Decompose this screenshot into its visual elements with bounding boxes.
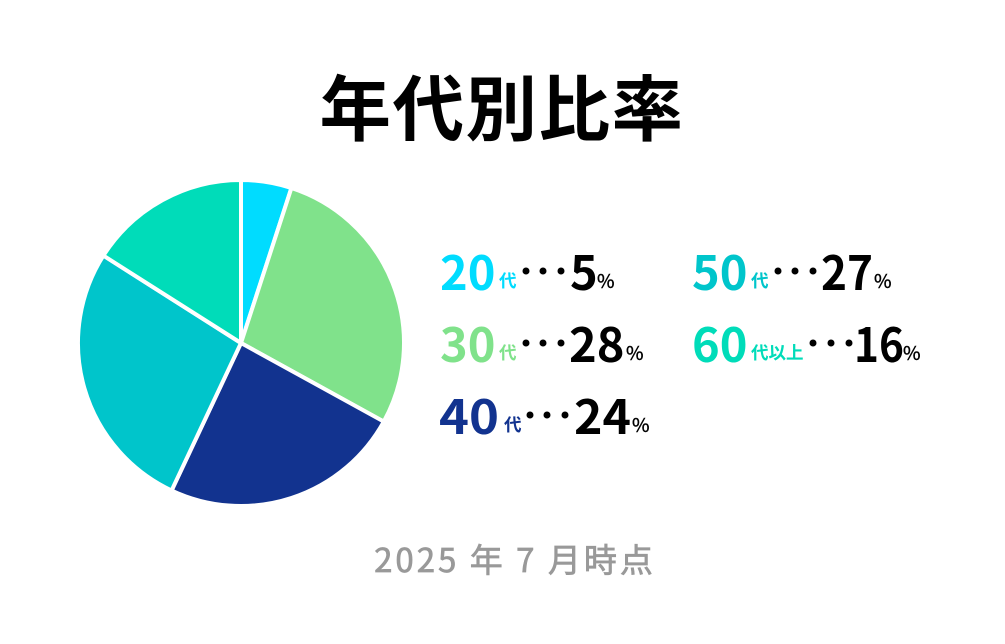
legend: 30代 28%: %: [626, 339, 644, 366]
legend: 50代 27%: %: [874, 267, 892, 294]
legend: 20代 5%: [440, 235, 614, 304]
legend: 60代以上 16%: 代以上: [751, 340, 804, 365]
pie chart: [78, 180, 404, 506]
legend: 60代以上 16%: 16: [854, 307, 904, 376]
legend: 20代 5%: 20: [440, 235, 495, 304]
date note: 2025 年 7 月時点: [374, 534, 656, 582]
legend: 30代 28%: 代: [499, 340, 517, 365]
legend: 40代 24%: 40: [439, 379, 499, 448]
legend: 20代 5%: 5: [570, 235, 598, 304]
legend: 40代 24%: %: [632, 411, 650, 438]
legend: 50代 27%: 27: [821, 235, 873, 304]
slice: 30代 28%: [241, 188, 404, 422]
legend: 60代以上 16%: %: [903, 339, 920, 366]
legend: 40代 24%: 24: [574, 379, 631, 448]
slice: 50代 27%: [78, 256, 241, 490]
legend: 60代以上 16%: 60: [692, 307, 747, 376]
legend: 50代 27%: 代: [751, 268, 769, 293]
legend: 30代 28%: [440, 307, 644, 376]
legend: 60代以上 16%: [692, 307, 920, 376]
legend: 50代 27%: 50: [692, 235, 747, 304]
slice: 20代 5%: [241, 180, 291, 343]
slice: 40代 24%: [172, 343, 384, 506]
legend: 20代 5%: %: [597, 267, 614, 294]
slice: 60代以上 16%: [103, 180, 241, 343]
legend: 20代 5%: 代: [499, 268, 517, 293]
legend: 30代 28%: 28: [569, 307, 624, 376]
legend: 50代 27%: [692, 235, 892, 304]
title: 年代別比率: [319, 52, 685, 156]
legend: 30代 28%: 30: [440, 307, 495, 376]
legend: 40代 24%: 代: [504, 412, 522, 437]
legend: 40代 24%: [439, 379, 650, 448]
